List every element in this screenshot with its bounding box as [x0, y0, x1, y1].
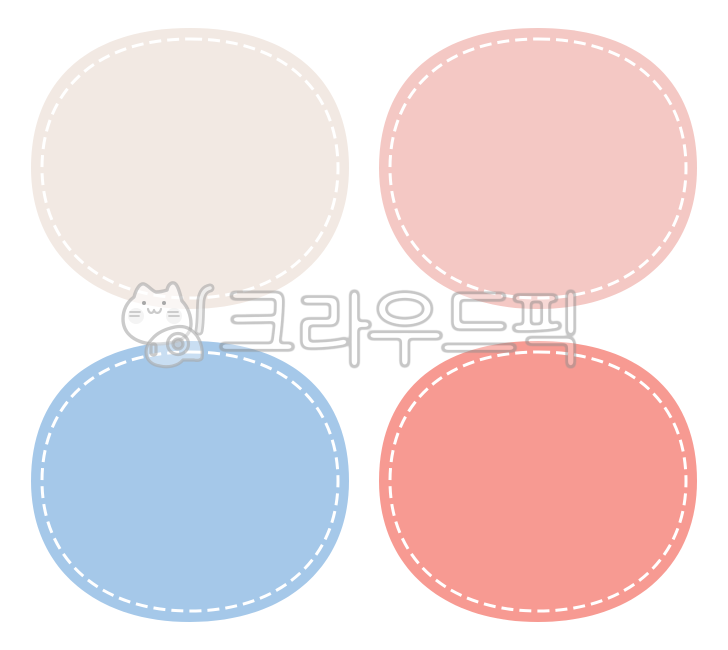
watermark wordmark: [219, 282, 584, 375]
panel: beige blob: [31, 28, 349, 309]
panel: pink blob: [379, 28, 697, 309]
icon: watermark cat: [123, 283, 191, 344]
watermark wordmark: 라: [295, 286, 371, 375]
watermark wordmark: 크: [219, 282, 295, 371]
watermark wordmark: 픽: [510, 286, 584, 375]
icon: watermark camera: [146, 288, 210, 367]
panel: blue blob: [31, 341, 349, 622]
watermark wordmark: 드: [441, 283, 517, 372]
watermark wordmark: 우: [367, 286, 443, 375]
panel: coral blob: [379, 341, 697, 622]
